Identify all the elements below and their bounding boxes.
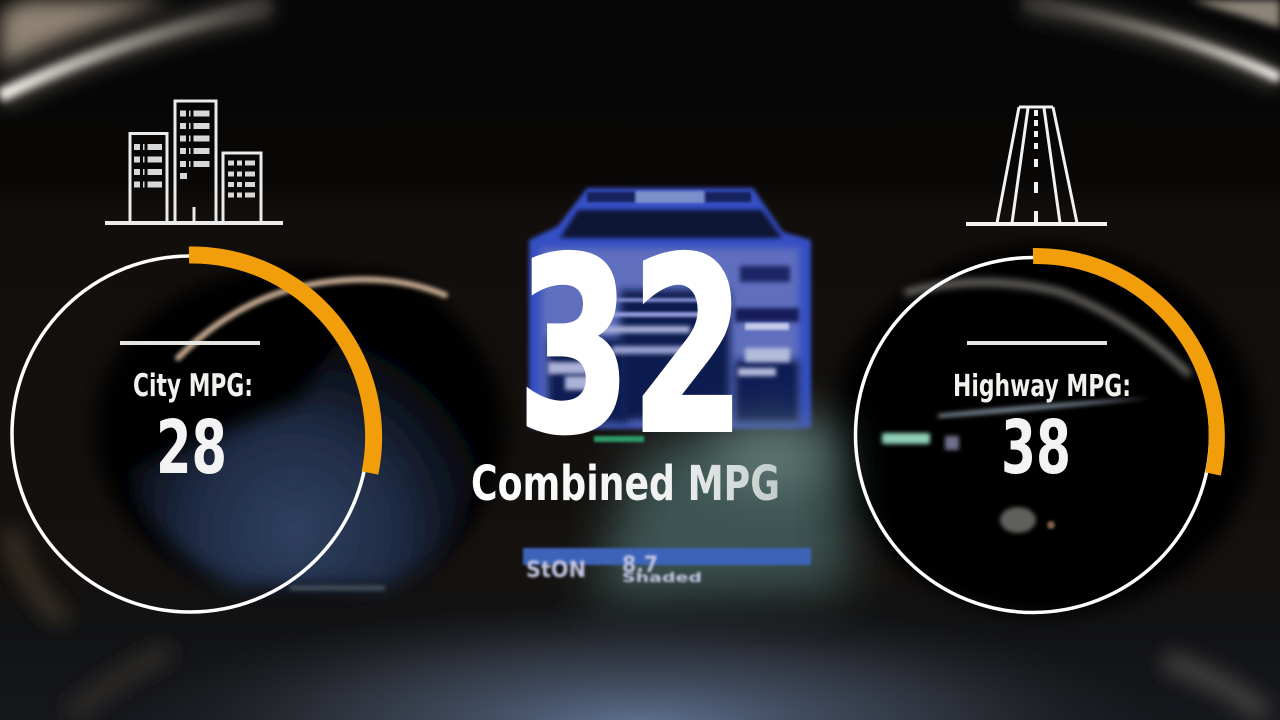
dark car details: [548, 266, 799, 423]
teal wash over car base: [710, 425, 830, 485]
icon: highway road: [966, 107, 1107, 224]
teal glow: [590, 419, 850, 600]
windshield: [560, 210, 782, 238]
combined MPG label: Combined MPG: [471, 456, 780, 512]
divider: [120, 341, 260, 345]
city value: 28: [156, 405, 227, 491]
blue readout bar: [523, 548, 811, 565]
gauge ring: [12, 256, 368, 612]
car body interior: [541, 248, 799, 425]
gauge: city MPG: [12, 255, 374, 612]
highway value: 38: [1001, 405, 1071, 491]
roof windows: [587, 191, 751, 203]
highway label: Highway MPG:: [953, 369, 1131, 404]
readout unit: Shaded: [622, 571, 702, 586]
divider: [967, 341, 1107, 345]
city label: City MPG:: [133, 368, 253, 404]
orange progress arc: [1033, 256, 1217, 474]
icon: city buildings: [105, 101, 283, 223]
gauge ring: [856, 258, 1210, 612]
car display panel: [523, 188, 850, 600]
headline number: 32: [517, 207, 745, 487]
blue car silhouette: [529, 188, 811, 428]
green status bar: [594, 436, 644, 442]
gauge: highway MPG: [856, 256, 1217, 613]
readout text: StON: [526, 558, 586, 583]
orange progress arc: [189, 255, 374, 473]
readout value: 8.7: [622, 553, 658, 578]
